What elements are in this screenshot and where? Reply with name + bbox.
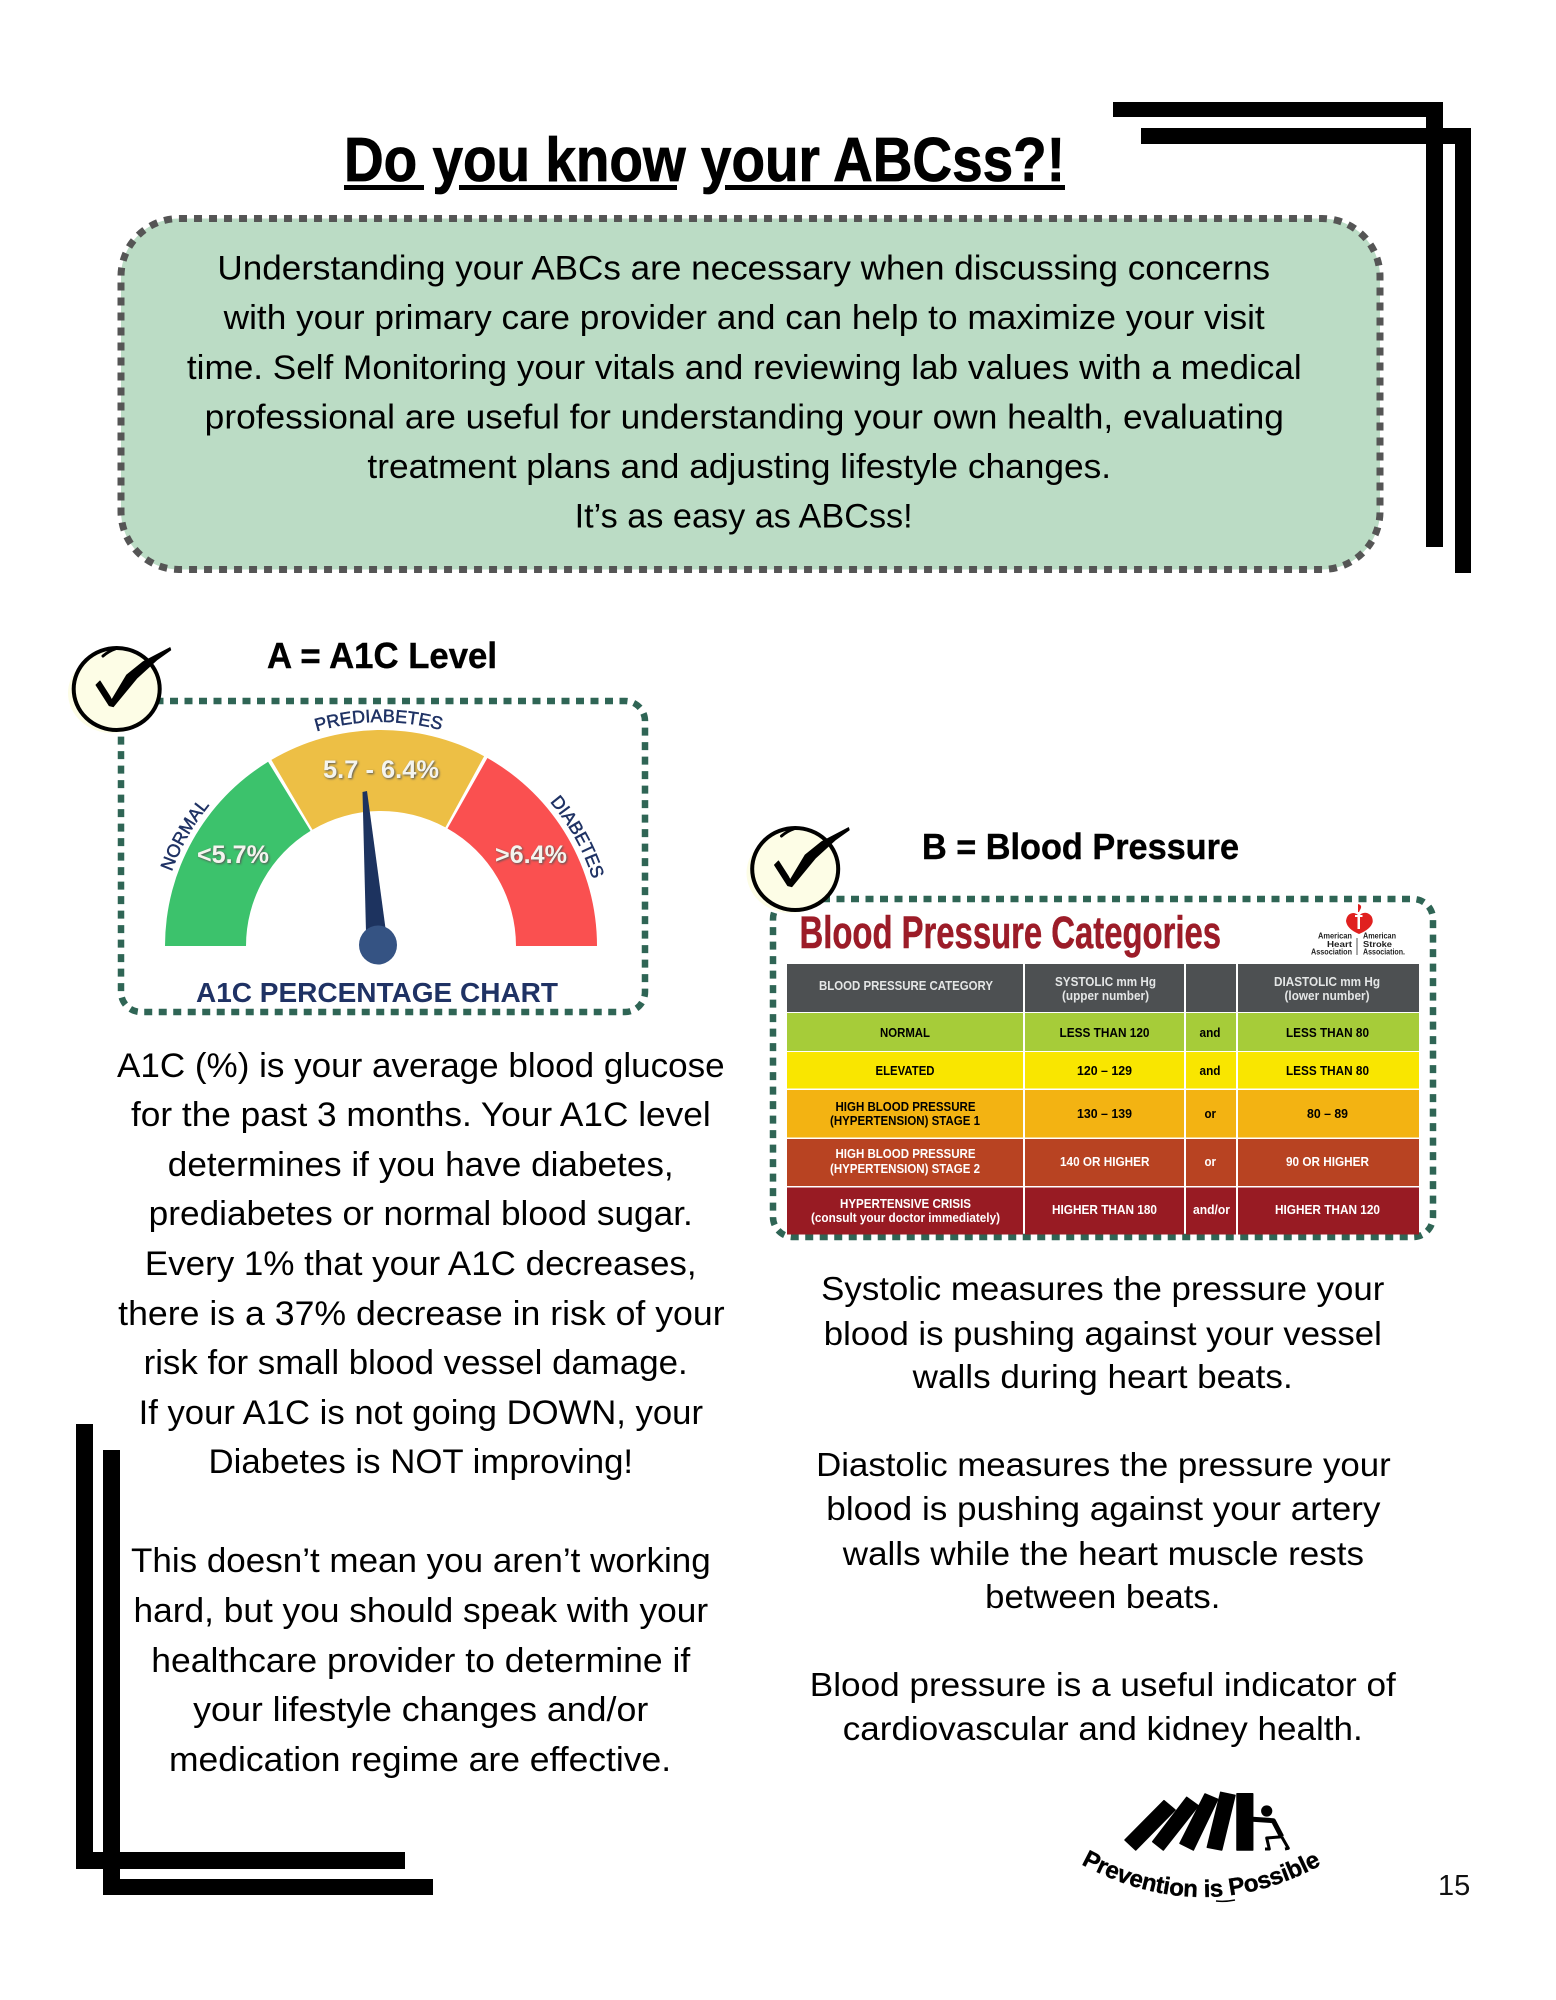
text block: blood pressure explanation: blood is pushing against your artery [826, 1490, 1381, 1527]
panel: intro [121, 218, 1380, 570]
intro text block: with your primary care provider and can help to maximize your visit [223, 299, 1265, 337]
gauge: value labels: 5.7 - 6.4% [323, 756, 439, 784]
logo: American Heart and Stroke Association: Association [1311, 948, 1352, 956]
page number: 15 [1438, 1870, 1470, 1902]
text block: blood pressure explanation: Systolic measures the pressure your [821, 1270, 1384, 1307]
text block: A1C explanation [117, 1047, 725, 1779]
text block: A1C explanation: prediabetes or normal blood sugar. [149, 1195, 693, 1233]
table: elevated row text: 120 – 129 [1077, 1064, 1132, 1078]
text block: A1C explanation: healthcare provider to determine if [151, 1642, 691, 1680]
gauge: needle [359, 791, 397, 964]
gauge: value labels [197, 756, 567, 869]
table: elevated row text: LESS THAN 80 [1286, 1064, 1369, 1078]
text block: A1C explanation: your lifestyle changes and/or [193, 1691, 648, 1729]
logo: American Heart and Stroke Association [1311, 904, 1405, 956]
gauge: value labels: <5.7% [197, 841, 269, 869]
table: crisis row text: and/or [1193, 1203, 1230, 1217]
table: stage 1 row text: 80 – 89 [1307, 1107, 1348, 1121]
table: stage 1 row text: HIGH BLOOD PRESSURE [836, 1100, 976, 1114]
table: crisis row text: (consult your doctor immediately) [811, 1211, 1000, 1225]
logo wordmark: Prevention is Possible [1082, 1850, 1320, 1898]
intro text block: It’s as easy as ABCss! [575, 498, 913, 536]
table: stage 2 row text: (HYPERTENSION) STAGE 2 [830, 1162, 980, 1176]
table: stage 2 row text: 90 OR HIGHER [1286, 1155, 1369, 1169]
text block: A1C explanation: for the past 3 months. Your A1C level [131, 1096, 711, 1134]
panel: blood pressure categories [773, 899, 1433, 1237]
table: normal row text: and [1200, 1026, 1220, 1040]
gauge: curved labels: DIABETES [550, 794, 604, 878]
logo: American Heart and Stroke Association: American [1363, 932, 1396, 940]
table: crisis row text: HYPERTENSIVE CRISIS [840, 1197, 971, 1211]
panel: A1C gauge [118, 698, 648, 1016]
table: stage 2 row text: HIGH BLOOD PRESSURE [836, 1147, 976, 1161]
title: Do you know your ABCss?! [344, 126, 1065, 195]
text block: blood pressure explanation: cardiovascular and kidney health. [843, 1710, 1363, 1747]
heading: A1C level: A = A1C Level [267, 635, 497, 676]
table: crisis row text: HIGHER THAN 120 [1275, 1203, 1380, 1217]
heading: blood pressure: B = Blood Pressure [922, 826, 1239, 867]
intro text block: professional are useful for understanding your own health, evaluating [205, 398, 1284, 436]
icon: checkmark A [68, 648, 171, 733]
top-right double bracket decoration [1113, 102, 1471, 573]
logo: American Heart and Stroke Association: American [1318, 932, 1352, 940]
text block: blood pressure explanation: walls during heart beats. [912, 1358, 1293, 1395]
table: header text: DIASTOLIC mm Hg [1274, 975, 1380, 989]
table: header text: (lower number) [1284, 989, 1370, 1003]
intro text block: treatment plans and adjusting lifestyle changes. [367, 448, 1111, 486]
text block: blood pressure explanation: between beats. [985, 1578, 1220, 1615]
text block: A1C explanation: A1C (%) is your average blood glucose [117, 1047, 725, 1085]
table: crisis row text [811, 1197, 1380, 1225]
logo: Prevention is Possible [1082, 1792, 1320, 1902]
table: header text: SYSTOLIC mm Hg [1055, 975, 1156, 989]
text block: blood pressure explanation: walls while the heart muscle rests [842, 1535, 1364, 1572]
text block: blood pressure explanation: blood is pushing against your vessel [824, 1315, 1382, 1352]
icon: falling dominoes [1125, 1792, 1253, 1850]
table: header text [819, 975, 1380, 1003]
text block: A1C explanation: risk for small blood vessel damage. [144, 1344, 688, 1382]
text block: blood pressure explanation: Diastolic measures the pressure your [816, 1446, 1391, 1483]
gauge: diabetes segment [448, 758, 597, 946]
gauge: value labels: >6.4% [495, 841, 567, 869]
gauge: curved labels: PREDIABETES [314, 709, 442, 732]
icon: checkmark B [746, 828, 849, 913]
logo: American Heart and Stroke Association: Association. [1363, 948, 1405, 956]
table: stage 1 row text: 130 – 139 [1077, 1107, 1132, 1121]
gauge: prediabetes segment [271, 730, 484, 830]
table: normal row text: LESS THAN 80 [1286, 1026, 1369, 1040]
logo: American Heart and Stroke Association: Heart [1327, 940, 1352, 949]
intro text block: time. Self Monitoring your vitals and reviewing lab values with a medical [187, 349, 1302, 387]
gauge: caption: A1C PERCENTAGE CHART [196, 977, 558, 1008]
text block: A1C explanation: Diabetes is NOT improving! [208, 1443, 633, 1481]
table: stage 1 row text: or [1204, 1107, 1216, 1121]
table: stage 2 row text [830, 1147, 1369, 1176]
table: header text: (upper number) [1062, 989, 1149, 1003]
table: normal row text: LESS THAN 120 [1060, 1026, 1150, 1040]
text block: blood pressure explanation: Blood pressure is a useful indicator of [810, 1666, 1397, 1703]
table: header text: BLOOD PRESSURE CATEGORY [819, 979, 994, 993]
chart title: Blood Pressure Categories [800, 907, 1221, 958]
text block: A1C explanation: hard, but you should speak with your [134, 1592, 708, 1630]
text block: A1C explanation: medication regime are effective. [169, 1741, 671, 1779]
text block: A1C explanation: Every 1% that your A1C decreases, [145, 1245, 697, 1283]
bottom-left double bracket decoration [76, 1424, 433, 1895]
table: crisis row text: HIGHER THAN 180 [1052, 1203, 1157, 1217]
intro text block: Understanding your ABCs are necessary when discussing concerns [217, 250, 1270, 288]
table: stage 2 row text: or [1204, 1155, 1216, 1169]
text block: blood pressure explanation [810, 1270, 1397, 1747]
gauge: normal segment [165, 762, 310, 946]
icon: person pushing [1253, 1805, 1288, 1849]
table: stage 1 row text [830, 1100, 1348, 1128]
text block: A1C explanation: there is a 37% decrease in risk of your [118, 1295, 725, 1333]
table: elevated row text [876, 1064, 1369, 1078]
logo: American Heart and Stroke Association: Stroke [1363, 940, 1393, 949]
gauge: curved labels [160, 709, 604, 878]
text block: A1C explanation: If your A1C is not going DOWN, your [139, 1394, 703, 1432]
table: elevated row text: and [1200, 1064, 1220, 1078]
table: elevated row text: ELEVATED [876, 1064, 934, 1078]
intro text block [187, 250, 1302, 536]
table: stage 1 row text: (HYPERTENSION) STAGE 1 [830, 1114, 980, 1128]
text block: A1C explanation: determines if you have diabetes, [168, 1146, 674, 1184]
text block: A1C explanation: This doesn’t mean you aren’t working [131, 1542, 711, 1580]
table: normal row text [880, 1026, 1369, 1040]
table: colored rows [787, 964, 1419, 1234]
gauge: curved labels: NORMAL [160, 802, 210, 871]
table: normal row text: NORMAL [880, 1026, 930, 1040]
table: stage 2 row text: 140 OR HIGHER [1060, 1155, 1150, 1169]
